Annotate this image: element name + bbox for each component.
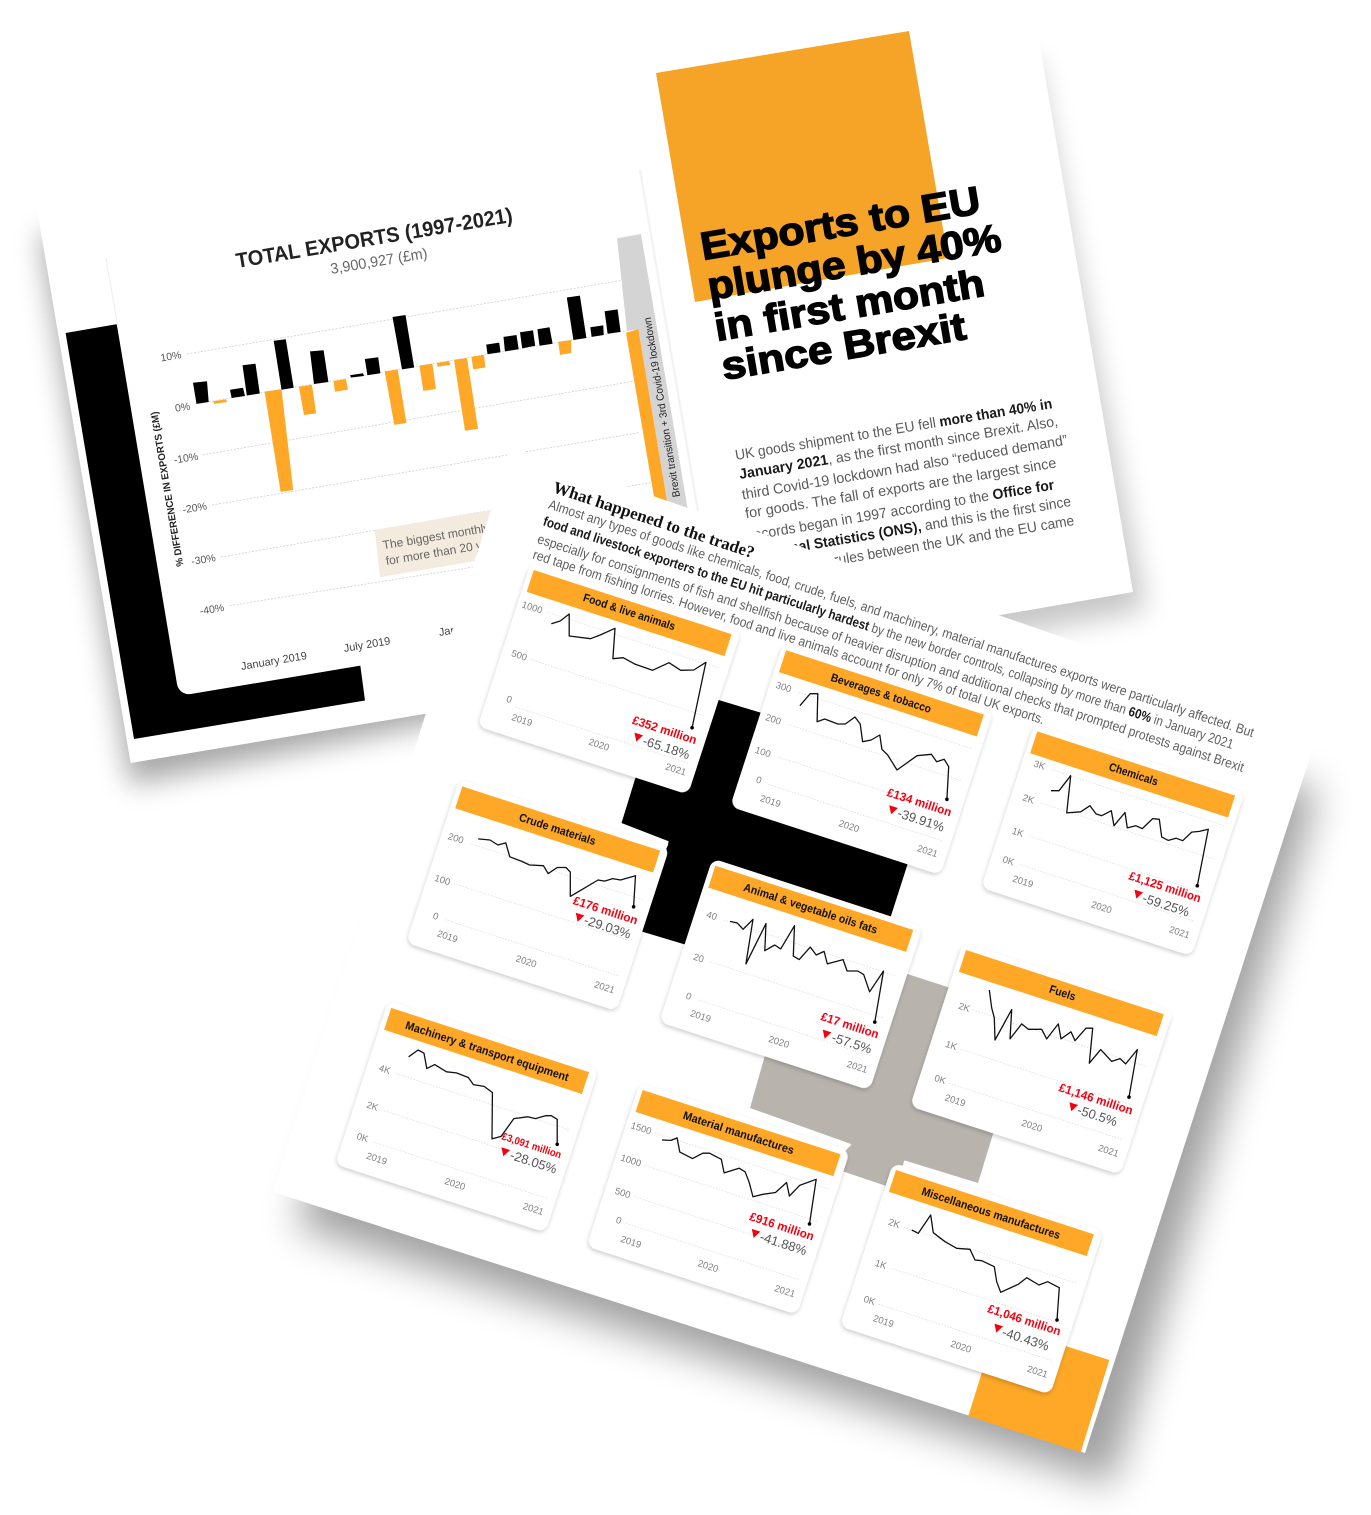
axis labels: 100 [433, 873, 451, 888]
axis labels: 2019 [943, 1093, 967, 1109]
axis labels [684, 910, 869, 1076]
axis labels: 40 [705, 910, 718, 923]
change: -29.03% [582, 912, 633, 942]
axis labels: 2020 [696, 1258, 720, 1275]
value: £352 million [631, 713, 699, 747]
axis labels: 2019 [1011, 874, 1034, 891]
black cross [622, 691, 923, 949]
card: Chemicals [981, 724, 1245, 956]
axis labels: 2019 [759, 793, 782, 810]
axis labels: 2K [365, 1100, 380, 1114]
axis labels: 2021 [521, 1201, 545, 1218]
axis labels: 200 [764, 712, 782, 728]
axis labels: 0 [614, 1215, 623, 1227]
section paragraph: especially for consignments of fish and shellfish because of heavier disruption and additional checks that prompted protests against Brexit [536, 531, 1246, 775]
axis labels [1001, 759, 1191, 941]
y axis labels: -20% [182, 500, 208, 516]
axis labels: 4K [377, 1063, 392, 1077]
header title: Machinery & transport equipment [404, 1020, 570, 1084]
axis labels: 0 [431, 911, 440, 923]
headline: in first month [711, 262, 988, 350]
intro paragraph: National Statistics (ONS), and this is the first since [755, 494, 1072, 562]
axis labels [505, 600, 687, 778]
change: -57.5% [830, 1030, 874, 1057]
axis labels [431, 831, 616, 996]
line chart [662, 1138, 816, 1224]
line chart [409, 1050, 557, 1144]
axis labels [753, 680, 939, 860]
axis labels: 1000 [619, 1153, 643, 1170]
axis labels: 2020 [837, 818, 861, 835]
line chart [912, 1215, 1059, 1320]
value: £176 million [571, 893, 640, 927]
card: Food & live animals [478, 563, 741, 795]
axis labels: 2020 [1020, 1118, 1043, 1135]
card: Crude materials [406, 779, 670, 1011]
axis labels: 500 [613, 1186, 632, 1201]
y axis labels: 0% [174, 401, 191, 415]
card: Fuels [910, 943, 1173, 1175]
change: -59.25% [1141, 890, 1192, 920]
x axis labels: January 2020 [438, 616, 506, 639]
callout: biggest monthly fall: for more than 20 years [385, 534, 506, 568]
y axis labels: -40% [199, 602, 225, 618]
axis labels: 2021 [773, 1283, 796, 1300]
x axis labels: January 2019 [240, 650, 308, 673]
axis labels: 1K [873, 1258, 889, 1272]
card: Animal & vegetable oils fats [659, 858, 923, 1090]
axis labels: 300 [774, 680, 793, 695]
header title: Fuels [1048, 984, 1077, 1003]
axis labels: 2019 [619, 1234, 643, 1251]
axis labels: 1K [944, 1039, 959, 1053]
change: -40.43% [1000, 1324, 1051, 1354]
axis labels: 0 [505, 694, 513, 706]
change: -41.88% [758, 1229, 809, 1258]
change: -28.05% [508, 1147, 559, 1177]
down arrow icon [749, 1229, 760, 1239]
section heading: What happened to the trade? [551, 478, 757, 562]
headline: plunge by 40% [704, 217, 1004, 309]
intro paragraph: for goods. The fall of exports are the largest since [744, 456, 1058, 522]
axis labels: 2021 [1097, 1143, 1120, 1160]
axis labels: 0 [684, 991, 693, 1003]
axis labels: 2K [957, 1001, 972, 1015]
value: £17 million [819, 1009, 881, 1041]
intro paragraph: new trade rules between the UK and the EU came [769, 513, 1075, 580]
down arrow icon [573, 913, 584, 923]
panel: what happened to the trade sheet [273, 447, 1320, 1485]
intro paragraph: UK goods shipment to the EU fell more than 40% in [734, 396, 1053, 464]
axis labels: 2021 [845, 1059, 869, 1076]
black accent block [66, 291, 365, 739]
panel: total exports sheet [33, 87, 718, 785]
axis labels [933, 1001, 1120, 1160]
down arrow icon [820, 1030, 831, 1040]
y axis labels: -30% [190, 552, 217, 568]
header title: Beverages & tobacco [829, 672, 933, 716]
axis labels: 3K [1032, 759, 1047, 773]
chart title: TOTAL EXPORTS (1997-2021) [234, 204, 514, 273]
line chart [551, 614, 706, 728]
axis labels [613, 1120, 796, 1300]
header title: Material manufactures [681, 1110, 795, 1157]
line chart [730, 919, 884, 1022]
panel: headline sheet [620, 5, 1146, 680]
axis labels: 2020 [1090, 899, 1113, 916]
axis labels: 2019 [872, 1313, 895, 1330]
value: £1,125 million [1127, 869, 1203, 905]
orange corner block [968, 1324, 1109, 1452]
axis labels: 1K [1010, 826, 1026, 840]
callout: biggest monthly fall [375, 505, 530, 577]
header title: Chemicals [1107, 761, 1159, 789]
axis labels: 2019 [436, 929, 459, 945]
axis labels: 2019 [365, 1151, 388, 1168]
down arrow icon [499, 1147, 510, 1158]
value: £134 million [885, 785, 953, 819]
line chart [800, 694, 949, 799]
intro paragraph: January 2021, as the first month since Brexit. Also, [738, 414, 1059, 483]
headline: since Brexit [718, 305, 969, 389]
axis labels: 2020 [767, 1034, 790, 1051]
bar chart [193, 296, 667, 503]
callout: biggest monthly fall: The biggest monthly fall [382, 518, 509, 552]
y axis labels: 10% [160, 349, 182, 364]
axis labels: 2K [1021, 793, 1036, 807]
axis labels: 2020 [443, 1176, 467, 1193]
chart subtitle: 3,900,927 (£m) [329, 245, 429, 278]
axis labels: 100 [753, 745, 772, 760]
change: -50.5% [1075, 1102, 1120, 1129]
event band [617, 234, 688, 509]
axis labels: 1000 [520, 600, 544, 616]
axis labels: 0K [355, 1131, 370, 1145]
headline: Exports to EU [697, 179, 984, 269]
value: £1,146 million [1057, 1080, 1135, 1118]
intro paragraph [734, 396, 1075, 580]
axis labels: 2020 [949, 1339, 972, 1356]
header title: Crude materials [517, 812, 597, 848]
header title: Animal & vegetable oils fats [742, 882, 879, 937]
axis labels: 1500 [629, 1120, 653, 1137]
axis labels: 200 [446, 831, 465, 847]
chart card [106, 171, 692, 696]
axis labels: 500 [510, 648, 528, 664]
y axis labels: -10% [173, 451, 199, 467]
card: Miscellaneous manufactures [840, 1163, 1103, 1395]
line chart [989, 990, 1137, 1097]
card: Machinery & transport equipment [335, 1001, 598, 1233]
grey cross [750, 970, 1005, 1189]
axis labels: 2021 [593, 979, 616, 996]
axis labels: 2019 [689, 1008, 712, 1025]
header title: Miscellaneous manufactures [920, 1186, 1062, 1242]
x axis labels [240, 616, 506, 673]
y axis labels [160, 349, 225, 618]
intro paragraph: third Covid-19 lockdown had also “reduced demand” [741, 433, 1069, 503]
y axis title: % DIFFERENCE IN EXPORTS (£M) [149, 411, 186, 567]
section paragraph: red tape from fishing lorries. However, food and live animals account for only 7% of total UK exports. [531, 547, 1046, 727]
line chart [478, 839, 636, 907]
axis labels: 2021 [1026, 1364, 1049, 1381]
x axis labels: July 2019 [343, 635, 391, 655]
axis labels: 2019 [510, 712, 533, 729]
axis labels: 0K [862, 1294, 877, 1308]
card: Beverages & tobacco [730, 643, 993, 875]
down arrow icon [1132, 890, 1143, 900]
axis labels: 2021 [664, 762, 687, 778]
change: -39.91% [896, 805, 947, 835]
axis labels [862, 1217, 1049, 1381]
axis labels: 2020 [587, 737, 611, 754]
axis labels: 0K [1001, 854, 1016, 869]
axis labels: 2K [887, 1217, 902, 1231]
down arrow icon [632, 733, 643, 743]
axis labels: 20 [692, 952, 705, 965]
card: Material manufactures [587, 1083, 850, 1315]
band label: Brexit transition + 3rd Covid-19 lockdown [642, 316, 683, 498]
value: £1,046 million [986, 1302, 1063, 1338]
header title: Food & live animals [581, 592, 677, 633]
axis labels: 0K [933, 1073, 948, 1087]
axis labels: 2021 [916, 843, 939, 860]
axis labels: 2020 [514, 954, 538, 970]
gridlines [187, 280, 654, 606]
down arrow icon [887, 805, 898, 816]
line chart [1051, 776, 1208, 886]
axis labels: 2021 [1168, 924, 1191, 941]
down arrow icon [992, 1324, 1003, 1334]
value: £3,091 million [500, 1131, 563, 1161]
value: £916 million [748, 1209, 816, 1243]
axis labels: 0 [754, 775, 763, 787]
section paragraph: food and livestock exporters to the EU hit particularly hardest by the new border controls, collapsing by more than 60% in January 2021 [541, 514, 1236, 752]
change: -65.18% [641, 733, 692, 762]
headline [697, 179, 1004, 389]
orange title block [656, 31, 948, 302]
intro paragraph: records began in 1997 according to the Office for [748, 477, 1056, 544]
down arrow icon [1067, 1102, 1078, 1113]
section paragraph: Almost any types of goods like chemicals, food, crude, fuels, and machinery, material manufactures exports were particularly affected. But [547, 497, 1256, 740]
axis labels [355, 1063, 545, 1218]
